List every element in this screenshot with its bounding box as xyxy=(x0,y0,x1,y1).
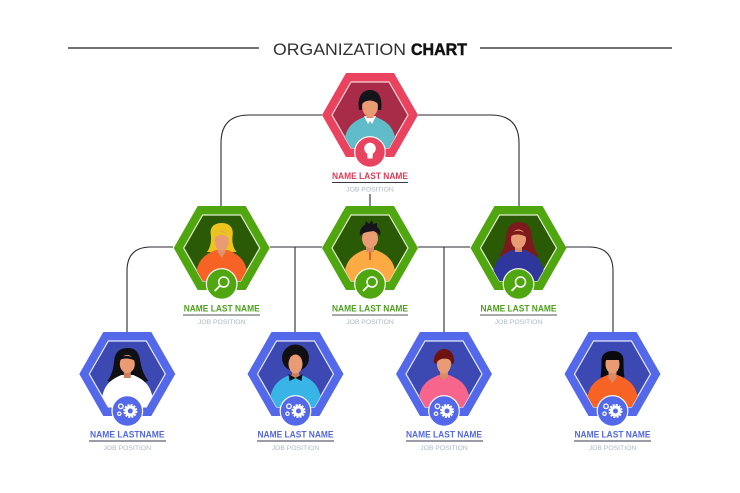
title xyxy=(68,41,672,59)
node: manager 2 xyxy=(322,206,418,299)
icon: magnifier xyxy=(206,269,237,299)
node: staff 2 xyxy=(248,332,344,426)
icon: gears xyxy=(112,396,143,426)
name: staff 1: JOB POSITION xyxy=(104,445,151,452)
name: staff 4: JOB POSITION xyxy=(589,445,636,452)
name: staff 3: NAME LAST NAME xyxy=(406,430,482,440)
name: manager 1: NAME LAST NAME xyxy=(184,304,260,314)
person: black bob with fringe xyxy=(586,351,638,407)
name: manager 1: JOB POSITION xyxy=(198,319,246,326)
icon: light bulb xyxy=(355,137,385,167)
name: manager 2: NAME LAST NAME xyxy=(332,304,408,314)
name: leader: JOB POSITION xyxy=(346,186,394,194)
person: leader xyxy=(344,90,396,148)
name: manager 3: NAME LAST NAME xyxy=(480,304,556,314)
title: CHART xyxy=(411,41,467,59)
name: manager 2: JOB POSITION xyxy=(346,319,394,326)
name: manager 1 xyxy=(183,304,260,326)
name: staff 3: JOB POSITION xyxy=(420,445,468,452)
person: spiky hair xyxy=(344,220,396,281)
node: staff 3 xyxy=(396,332,492,426)
name: manager 3: JOB POSITION xyxy=(495,319,542,326)
name: staff 1: NAME LASTNAME xyxy=(90,430,165,440)
connector lines xyxy=(127,115,613,332)
icon: gears xyxy=(280,396,311,426)
name: staff 1 xyxy=(89,430,166,452)
name: leader xyxy=(332,171,408,194)
icon: magnifier xyxy=(503,269,534,299)
person: long red hair xyxy=(492,222,544,281)
name: staff 2: JOB POSITION xyxy=(272,445,319,452)
title: ORGANIZATION xyxy=(273,41,406,59)
icon: gears xyxy=(597,396,628,426)
name: staff 3 xyxy=(406,430,483,452)
person: afro and bow tie xyxy=(270,344,322,407)
name: staff 2 xyxy=(257,430,334,452)
icon: magnifier xyxy=(355,269,385,299)
name: leader: NAME LAST NAME xyxy=(332,171,408,181)
icon: gears xyxy=(429,396,459,426)
name: staff 4: NAME LAST NAME xyxy=(574,430,650,440)
node: manager 3 xyxy=(470,206,566,299)
person: curly black hair xyxy=(101,348,153,407)
node: top leader xyxy=(322,73,418,167)
node: staff 1 xyxy=(79,332,175,426)
name: staff 4 xyxy=(574,430,651,452)
node: manager 1 xyxy=(174,206,270,299)
person: short brown hair xyxy=(418,349,470,407)
person: yellow hair xyxy=(196,223,248,281)
name: staff 2: NAME LAST NAME xyxy=(258,430,334,440)
node: staff 4 xyxy=(564,332,660,426)
name: manager 2 xyxy=(332,304,408,326)
name: manager 3 xyxy=(480,304,557,326)
